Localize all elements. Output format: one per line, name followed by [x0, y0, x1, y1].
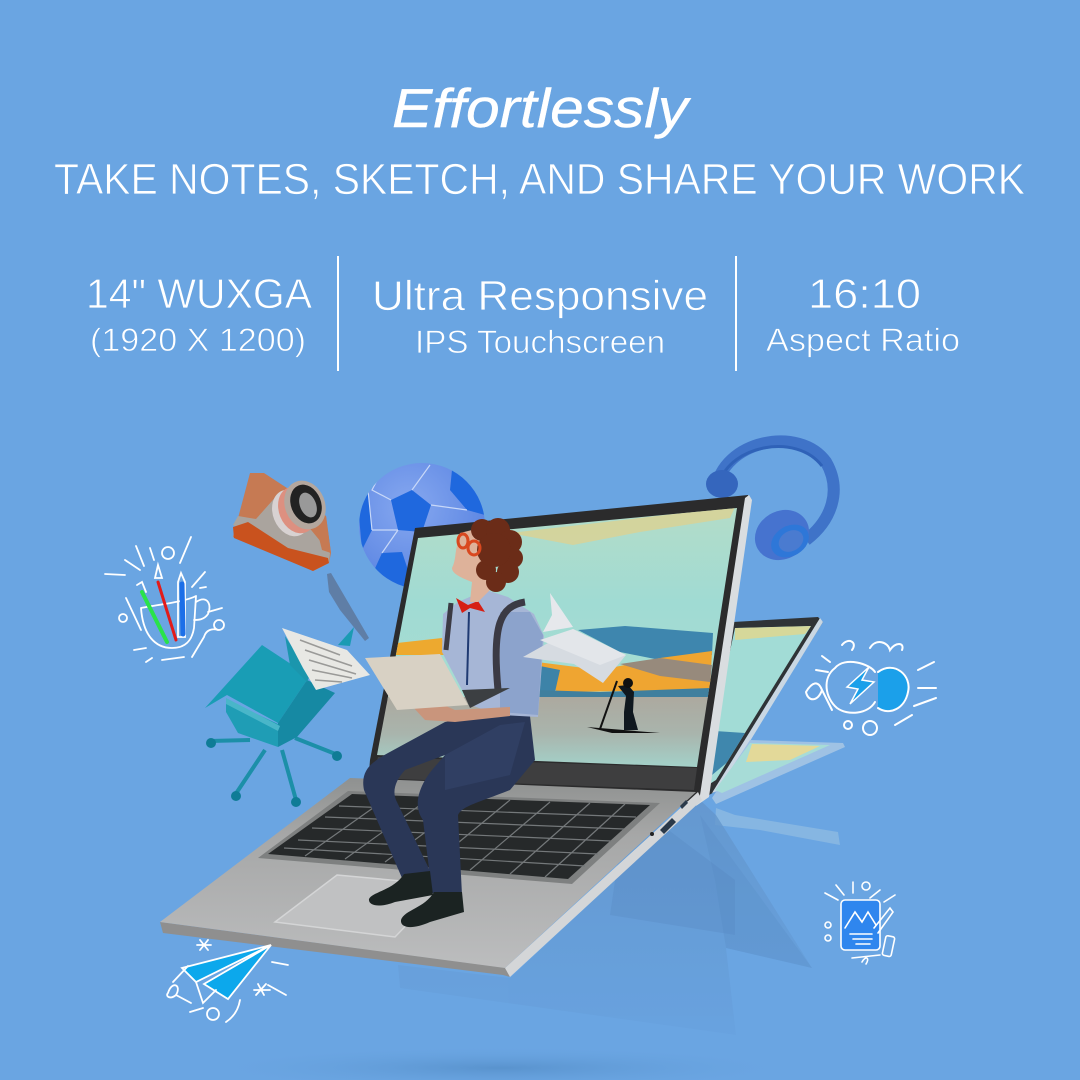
trackpad [275, 875, 445, 937]
curly hair [471, 518, 523, 592]
rear laptop lid [700, 617, 823, 800]
flying papers [523, 593, 626, 683]
held laptop [365, 654, 510, 710]
icon: soccer ball [358, 463, 490, 592]
doodle: paper plane [167, 940, 288, 1022]
spec: display size: 14" WUXGA [86, 270, 312, 317]
icon: camera [233, 473, 333, 571]
spec: aspect ratio [766, 270, 960, 358]
shoes [369, 871, 464, 927]
ground shadow [200, 1046, 800, 1080]
doodle: tablet with pen [825, 882, 895, 964]
man sitting with laptop [363, 518, 544, 927]
paddle boarder [587, 678, 660, 733]
doodle: cup with brushes [105, 537, 224, 662]
spec: touchscreen: Ultra Responsive [372, 272, 708, 319]
doodle: lightning speech bubbles [806, 641, 936, 735]
spec: aspect ratio: Aspect Ratio [766, 322, 960, 358]
spec row [86, 256, 960, 371]
icon: headphones [706, 441, 834, 570]
keyboard [258, 791, 660, 884]
rear laptop lower panel [712, 740, 845, 804]
face and neck [452, 530, 492, 602]
spec: display size [86, 270, 312, 358]
bow tie [456, 598, 485, 613]
suspenders [446, 602, 525, 690]
main laptop base [160, 778, 702, 977]
laptop reflection [398, 800, 812, 1035]
icon: tablet [327, 573, 369, 641]
title: Effortlessly [392, 77, 692, 139]
glasses [458, 534, 480, 555]
spec: aspect ratio: 16:10 [808, 270, 921, 317]
main laptop lid [368, 495, 752, 806]
rear laptop, tent position [700, 617, 845, 845]
icon: document page [282, 628, 370, 690]
side ports [650, 800, 688, 836]
spec: touchscreen: IPS Touchscreen [415, 324, 665, 360]
hand [409, 696, 510, 722]
spec: touchscreen [372, 272, 708, 360]
shirt [442, 590, 544, 717]
icon: chair [205, 627, 354, 807]
trousers [363, 712, 535, 895]
spec: display size: (1920 X 1200) [90, 322, 306, 358]
subtitle: TAKE NOTES, SKETCH, AND SHARE YOUR WORK [54, 155, 1025, 204]
screen image: beach at sunset [370, 505, 745, 769]
